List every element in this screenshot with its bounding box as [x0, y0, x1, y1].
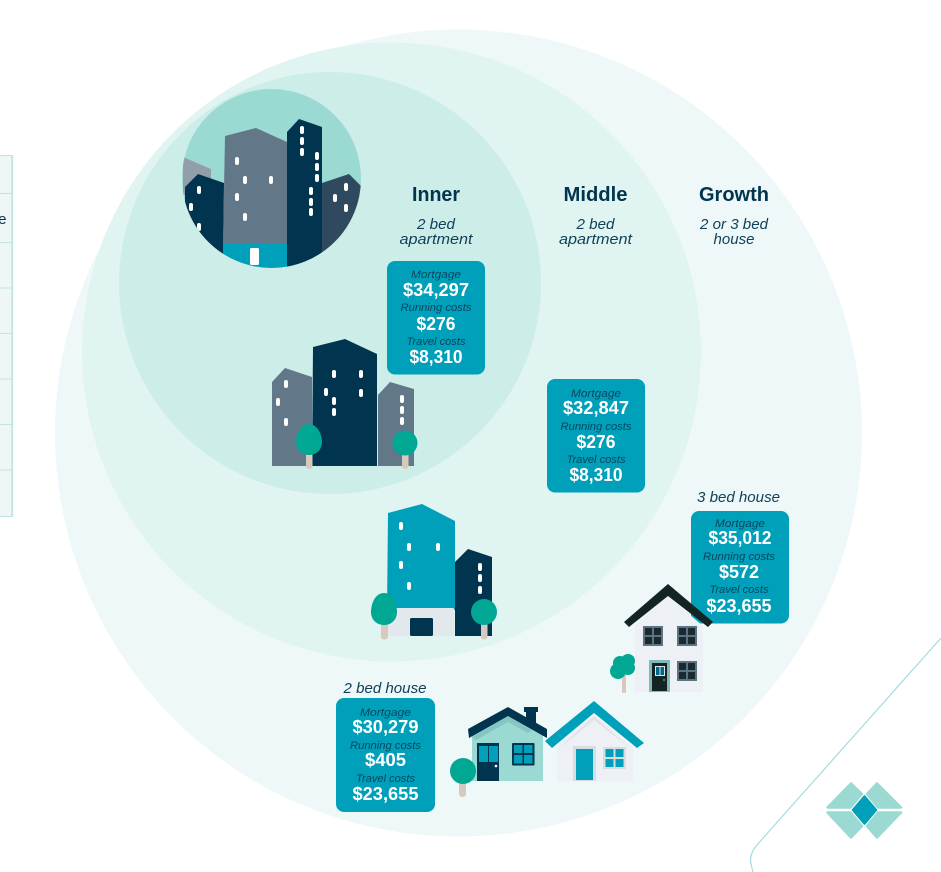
illustration: white 2 bed house: [545, 701, 644, 781]
cost card: inner: $8,310: [410, 347, 462, 367]
cost card: middle: Travel costs: [566, 454, 626, 466]
cost card: middle: $32,847: [563, 398, 629, 418]
subheading: growth dwelling type: [699, 217, 769, 248]
illustration: middle apartment towers: [371, 504, 497, 640]
circle: growth zone: [55, 30, 862, 836]
cost card: growth 3 bed house: $23,655: [706, 596, 772, 616]
cost card: growth 3 bed house: $35,012: [708, 528, 772, 548]
subheading: growth dwelling type: 2 or 3 bed: [699, 217, 769, 233]
subheading: middle dwelling type: apartment: [559, 232, 633, 248]
cropped table at left edge: [0, 155, 12, 517]
heading: Growth: Growth: [699, 184, 769, 206]
cost card: inner: [387, 261, 485, 374]
cost card: inner: $34,297: [403, 280, 469, 300]
cost card: growth 3 bed house: [691, 511, 789, 624]
cost card: inner: Running costs: [400, 302, 472, 314]
heading: Inner: Inner: [412, 184, 460, 206]
cost card: inner: Mortgage: [411, 269, 461, 281]
cost card: growth 2 bed house: $405: [365, 750, 406, 770]
cost card: growth 2 bed house: Travel costs: [356, 773, 415, 785]
cost card: growth 2 bed house: $30,279: [352, 717, 418, 737]
subheading: middle dwelling type: 2 bed: [575, 217, 615, 233]
cost card: middle: Running costs: [560, 421, 632, 433]
cost card: middle: [547, 379, 645, 492]
subheading: inner dwelling type: 2 bed: [416, 217, 456, 233]
subheading: inner dwelling type: [400, 217, 474, 248]
illustration: teal 2 bed house: [450, 707, 547, 797]
subheading: growth dwelling type: house: [714, 232, 754, 248]
cost card: growth 3 bed house: Travel costs: [710, 584, 769, 596]
heading: Middle: Middle: [564, 184, 628, 206]
illustration: city skyline in circle: [182, 89, 362, 272]
subheading: middle dwelling type: [559, 217, 633, 248]
subheading: inner dwelling type: apartment: [400, 232, 474, 248]
cost card: middle: $276: [576, 432, 616, 452]
cost card: growth 2 bed house: [336, 698, 435, 812]
logo: [828, 784, 901, 838]
cost card: inner: Travel costs: [406, 336, 466, 348]
cost card: inner: $276: [416, 314, 456, 334]
cost card: growth 2 bed house: Mortgage: [360, 707, 411, 719]
circle: inner zone: [119, 72, 541, 494]
cost card: middle: Mortgage: [571, 388, 621, 400]
illustration: 3 bed house: [610, 584, 713, 693]
cost card: growth 2 bed house: $23,655: [352, 784, 418, 804]
label: 3 bed house: 3 bed house: [697, 490, 780, 506]
circle: middle zone: [82, 42, 701, 662]
label: 2 bed house: 2 bed house: [342, 681, 426, 697]
decorative corner panel line: [751, 638, 941, 872]
cost card: growth 3 bed house: Running costs: [703, 551, 776, 563]
cost card: growth 3 bed house: Mortgage: [715, 518, 765, 530]
cost card: middle: $8,310: [570, 465, 622, 485]
illustration: inner apartment towers: [272, 339, 418, 469]
cost card: growth 3 bed house: $572: [719, 562, 759, 582]
cost card: growth 2 bed house: Running costs: [350, 740, 421, 752]
